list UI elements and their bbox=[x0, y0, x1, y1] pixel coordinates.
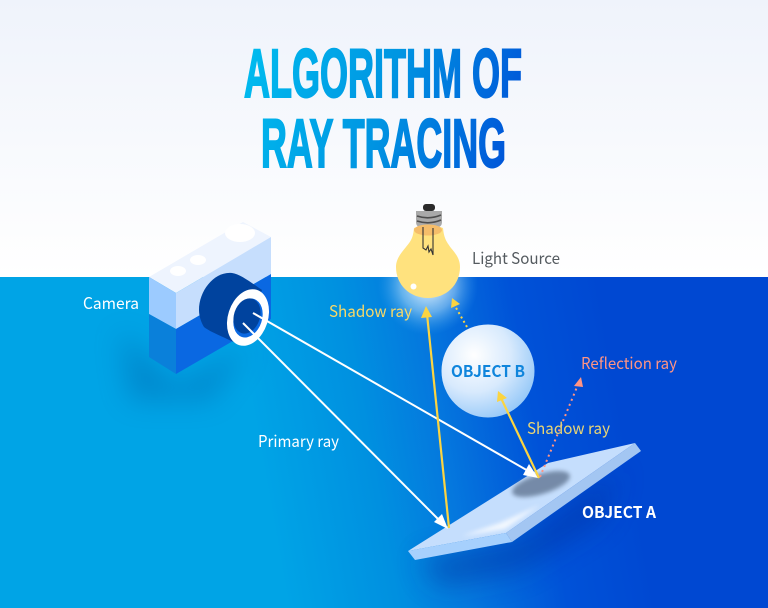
label: shadow ray right: Shadow ray bbox=[527, 415, 611, 439]
object a plate bbox=[408, 443, 641, 560]
label: object b: OBJECT B bbox=[451, 358, 525, 382]
label: primary ray: Primary ray bbox=[258, 428, 340, 452]
icon: light bulb bbox=[396, 204, 460, 298]
arrow: shadow ray to light bbox=[421, 306, 449, 528]
arrow: reflection ray bbox=[540, 377, 583, 477]
title: RAY TRACING bbox=[261, 105, 506, 182]
lens barrel bbox=[199, 273, 262, 345]
title: ALGORITHM OF bbox=[244, 35, 522, 112]
label: reflection ray: Reflection ray bbox=[581, 350, 678, 374]
label: object a: OBJECT A bbox=[582, 499, 657, 523]
object b sphere bbox=[442, 324, 534, 418]
arrow: primary ray to shadow point bbox=[253, 313, 538, 478]
icon: camera bbox=[149, 222, 276, 374]
arrow: primary ray to object a front bbox=[243, 323, 448, 529]
label: camera: Camera bbox=[83, 290, 139, 314]
camera shadow bbox=[118, 342, 234, 407]
bulb glow bbox=[382, 277, 474, 330]
label: shadow ray left: Shadow ray bbox=[329, 298, 413, 322]
label: light source: Light Source bbox=[472, 245, 560, 269]
object a shadow bbox=[420, 470, 620, 585]
arrow: dotted ray to light bbox=[451, 298, 467, 327]
arrow: shadow ray to object b bbox=[497, 391, 539, 478]
title bbox=[244, 35, 522, 182]
shadow on plate bbox=[509, 466, 573, 502]
lens ring bbox=[220, 284, 276, 351]
